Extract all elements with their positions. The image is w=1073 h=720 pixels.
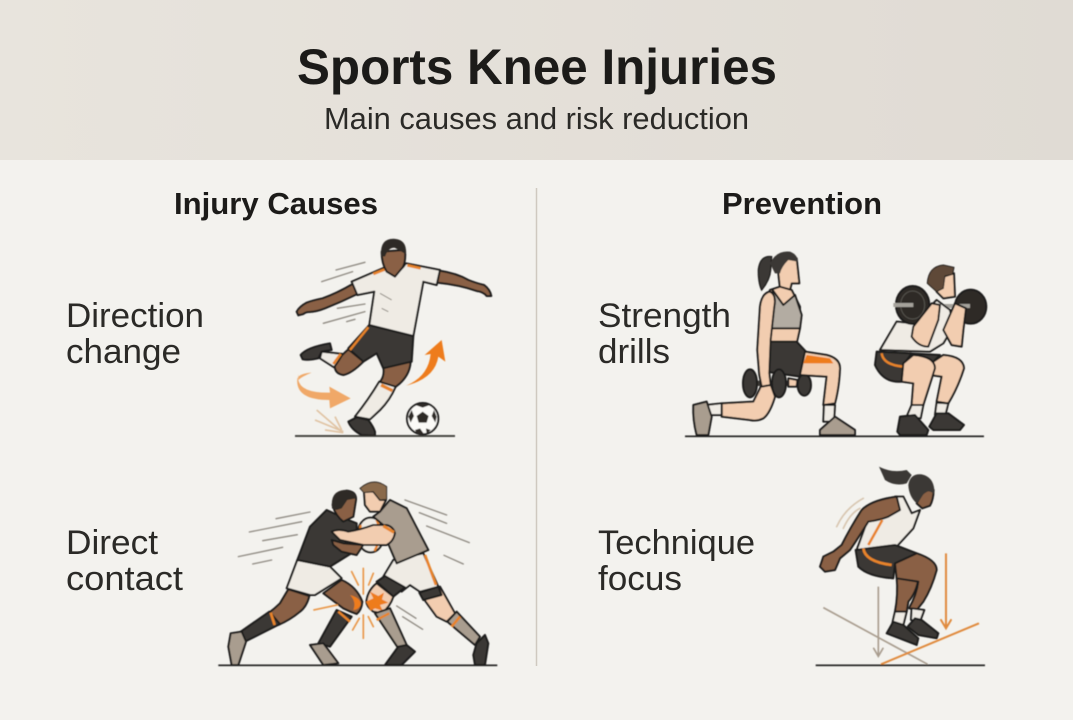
label: direct contact: contact [66,560,184,598]
illustration: jump landing technique [816,467,985,665]
label: direction change: change [66,333,181,371]
title: Sports Knee Injuries [297,39,777,95]
label: technique focus: focus [598,560,682,598]
label: strength drills: Strength [598,297,731,335]
heading: injury causes: Injury Causes [174,186,378,221]
panel: injury causes [66,186,497,665]
label: direction change: Direction [66,297,204,335]
label: strength drills: drills [598,333,670,371]
panel: prevention [598,186,986,665]
heading: prevention: Prevention [722,186,882,221]
illustration: two rugby players in contact [218,482,497,665]
label: direct contact: Direct [66,524,159,562]
illustration: lunge and barbell squat [685,251,986,436]
label: technique focus: Technique [598,524,755,562]
subtitle: Main causes and risk reduction [324,101,749,136]
illustration: soccer player changing direction [295,239,491,436]
header band [0,0,1073,160]
